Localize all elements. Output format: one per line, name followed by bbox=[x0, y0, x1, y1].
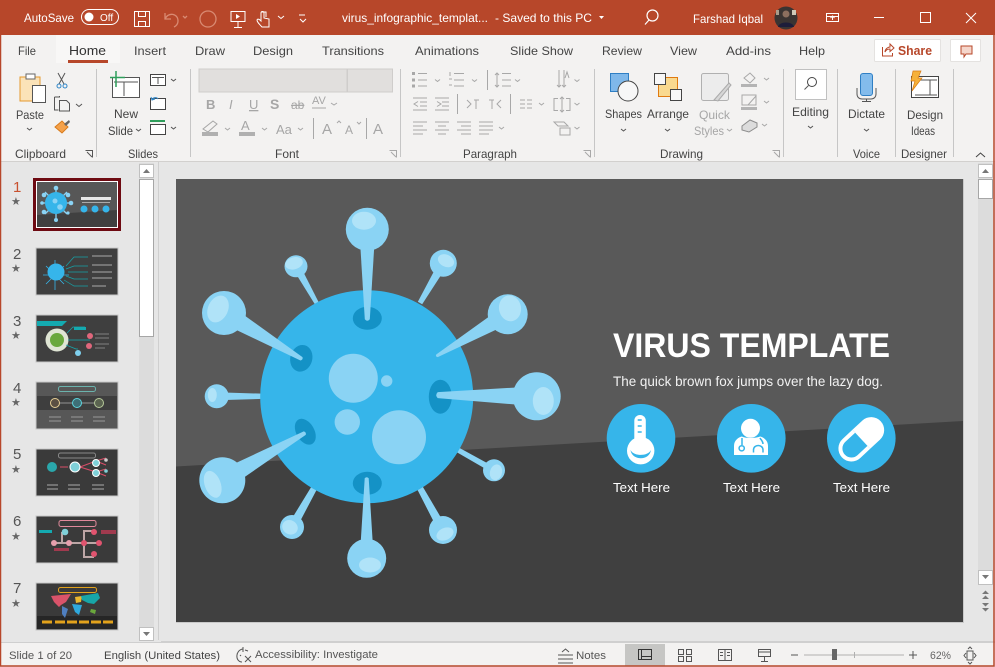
clipboard group: Paste bbox=[16, 108, 44, 122]
slide bbox=[176, 179, 964, 623]
icon: fit to window bbox=[964, 647, 976, 664]
font format buttons bbox=[202, 95, 383, 139]
designer group: Ideas bbox=[911, 124, 935, 138]
designer group: Designer bbox=[901, 147, 947, 161]
drawing group bbox=[605, 73, 780, 161]
slide numbers and stars: ★ bbox=[11, 262, 21, 275]
window controls bbox=[826, 12, 976, 23]
slide numbers and stars: 1 bbox=[13, 179, 21, 196]
group separators bbox=[96, 69, 954, 157]
icon: undo and redo bbox=[165, 11, 216, 27]
zoom slider bbox=[791, 649, 951, 662]
voice group bbox=[848, 74, 885, 161]
ribbon tabs: View bbox=[670, 44, 697, 58]
ribbon tabs: Design bbox=[253, 44, 293, 58]
slide numbers and stars: ★ bbox=[11, 530, 21, 543]
status bar: English (United States) bbox=[104, 650, 220, 662]
notes button bbox=[558, 649, 607, 663]
user avatar bbox=[774, 6, 798, 30]
icon: pill bbox=[827, 404, 896, 473]
title bar bbox=[0, 0, 995, 35]
font group bbox=[199, 69, 396, 161]
view buttons bbox=[625, 644, 770, 666]
ribbon tabs: Review bbox=[602, 44, 642, 58]
voice group: Voice bbox=[853, 147, 880, 161]
ribbon tabs: Add-ins bbox=[726, 44, 771, 58]
clipboard group bbox=[15, 73, 92, 161]
label: doctor: Text Here bbox=[723, 480, 780, 495]
slide numbers and stars bbox=[11, 179, 21, 610]
thumbnail 2 bbox=[36, 248, 118, 295]
slide dark lower band bbox=[176, 421, 963, 622]
notes button: Notes bbox=[576, 650, 607, 662]
zoom slider: 62% bbox=[930, 650, 951, 662]
icon: cut, copy, format painter bbox=[54, 73, 82, 133]
label: thermometer: Text Here bbox=[613, 480, 670, 495]
slides group bbox=[108, 71, 176, 161]
thumbnail 4 bbox=[36, 382, 118, 429]
slide numbers and stars: ★ bbox=[11, 463, 21, 476]
autosave toggle bbox=[24, 10, 118, 25]
thumbnail 5 bbox=[36, 449, 118, 496]
font format buttons: A bbox=[322, 121, 332, 138]
slide numbers and stars: ★ bbox=[11, 329, 21, 342]
clipboard group: Clipboard bbox=[15, 147, 66, 161]
ribbon tabs: Home bbox=[69, 44, 106, 58]
thick spikes bbox=[217, 229, 537, 558]
icon: new slide bbox=[110, 71, 140, 98]
slides group: New bbox=[114, 107, 138, 121]
document title: virus_infographic_templat... bbox=[342, 11, 488, 25]
virus illustration bbox=[199, 208, 561, 578]
icon: save bbox=[134, 12, 150, 26]
thin spikes behind body bbox=[217, 261, 495, 532]
virus body bbox=[260, 290, 473, 503]
slide numbers and stars: 3 bbox=[13, 313, 21, 330]
font format buttons: AV bbox=[312, 95, 327, 107]
thumbnail pane bbox=[11, 163, 154, 640]
drawing group: Arrange bbox=[647, 107, 689, 121]
slide subtitle: The quick brown fox jumps over the lazy dog. bbox=[613, 374, 883, 389]
ribbon tabs: Insert bbox=[134, 44, 167, 58]
font format buttons: U bbox=[249, 97, 258, 112]
comments button bbox=[950, 40, 980, 62]
label: pill: Text Here bbox=[833, 480, 890, 495]
autosave toggle: AutoSave bbox=[24, 11, 74, 25]
ribbon tabs: Help bbox=[799, 44, 825, 58]
autosave toggle: Off bbox=[100, 13, 113, 24]
slide numbers and stars: ★ bbox=[11, 597, 21, 610]
paragraph group bbox=[412, 70, 590, 161]
ribbon tabs: File bbox=[18, 44, 36, 58]
font format buttons: A bbox=[345, 123, 353, 137]
font format buttons: A bbox=[241, 118, 250, 133]
paragraph buttons bbox=[412, 70, 580, 135]
editing group bbox=[792, 70, 829, 128]
share button bbox=[874, 40, 940, 62]
thumbnail 7 bbox=[36, 583, 118, 630]
drawing group: Drawing bbox=[660, 147, 703, 161]
ribbon tabs: Transitions bbox=[322, 44, 384, 58]
thumbnail 3 bbox=[36, 315, 118, 362]
title bar: - Saved to this PC bbox=[495, 11, 592, 25]
font format buttons: Aa bbox=[276, 122, 293, 137]
font name and size boxes bbox=[199, 69, 347, 92]
drawing group: Styles bbox=[694, 124, 724, 138]
icon: arrange bbox=[654, 74, 682, 100]
spike head highlights bbox=[200, 212, 554, 572]
designer group bbox=[901, 71, 947, 161]
icon: paste bbox=[20, 74, 46, 102]
slides group: Slide bbox=[108, 124, 133, 138]
slide title: VIRUS TEMPLATE bbox=[613, 327, 890, 365]
icon: shapes bbox=[610, 74, 638, 101]
status bar: Accessibility: Investigate bbox=[255, 649, 378, 661]
voice group: Dictate bbox=[848, 107, 885, 121]
slide numbers and stars: 6 bbox=[13, 513, 21, 530]
thumbnail 6 bbox=[36, 516, 118, 563]
share button: Share bbox=[898, 43, 932, 58]
user name: Farshad Iqbal bbox=[693, 12, 763, 26]
designer group: Design bbox=[907, 108, 943, 122]
icon: quick styles bbox=[702, 74, 731, 101]
ribbon tabs: Draw bbox=[195, 44, 225, 58]
drawing group: Shapes bbox=[605, 107, 642, 121]
status bar: Slide 1 of 20 bbox=[9, 650, 72, 662]
thumbnail 1 bbox=[33, 178, 121, 231]
editing group: Editing bbox=[792, 105, 829, 119]
font format buttons: I bbox=[229, 97, 233, 112]
spike heads bbox=[199, 208, 561, 578]
slide numbers and stars: 5 bbox=[13, 446, 21, 463]
status bar bbox=[0, 643, 995, 666]
icon: accessibility bbox=[237, 647, 251, 662]
body craters bbox=[329, 354, 426, 464]
font format buttons: ab bbox=[291, 98, 305, 112]
font format buttons: S bbox=[270, 96, 279, 112]
collapse ribbon arrow bbox=[976, 153, 985, 157]
ribbon bbox=[0, 35, 995, 162]
slide numbers and stars: 2 bbox=[13, 246, 21, 263]
font group: Font bbox=[275, 147, 300, 161]
icon: thermometer bbox=[607, 404, 675, 473]
slides group: Slides bbox=[128, 147, 158, 161]
icon: layout, reset, section bbox=[150, 74, 176, 134]
paragraph group: Paragraph bbox=[463, 147, 517, 161]
main scrollbar bbox=[978, 163, 993, 612]
drawing group: Quick bbox=[699, 108, 731, 122]
icon: doctor bbox=[717, 404, 786, 473]
font format buttons: A bbox=[373, 121, 383, 138]
ribbon tabs: Slide Show bbox=[510, 44, 573, 58]
icon: search bbox=[645, 10, 658, 24]
font format buttons: B bbox=[206, 97, 215, 112]
slide numbers and stars: ★ bbox=[11, 396, 21, 409]
icon: present and touch bbox=[231, 12, 306, 28]
slide numbers and stars: 4 bbox=[13, 380, 21, 397]
ribbon tabs: Animations bbox=[415, 44, 479, 58]
slide numbers and stars: 7 bbox=[13, 580, 21, 597]
slide numbers and stars: ★ bbox=[11, 195, 21, 208]
thumbnail scrollbar bbox=[139, 163, 154, 640]
pane divider bbox=[0, 162, 995, 642]
icon: fill, outline, effects bbox=[741, 73, 769, 132]
ribbon tabs bbox=[18, 35, 825, 63]
body sockets bbox=[287, 307, 452, 495]
